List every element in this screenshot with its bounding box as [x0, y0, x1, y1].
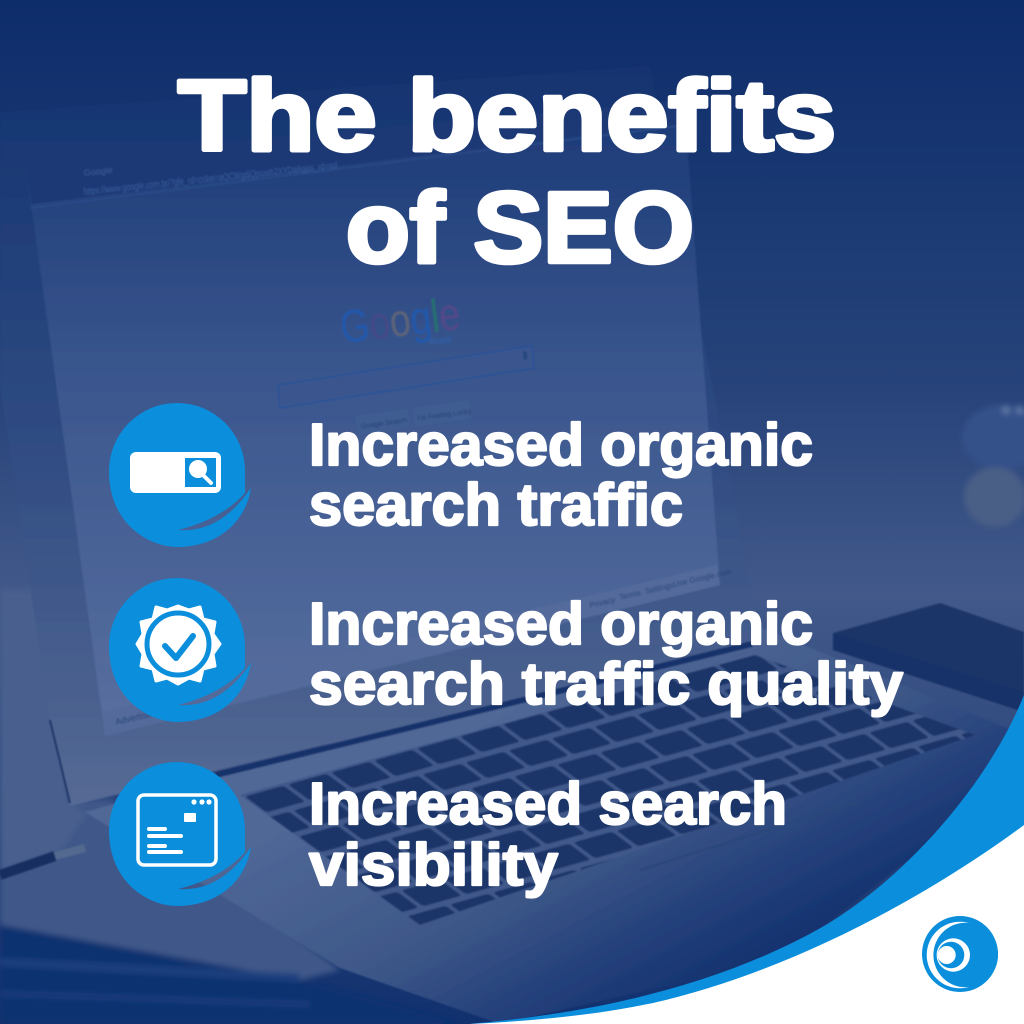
background photo: laptop on desk: Use Google.com	[672, 567, 733, 589]
benefit 2 icon: quality badge	[109, 578, 251, 722]
search buttons: I'm Feeling Lucky	[417, 408, 472, 423]
background photo: laptop on desk: Google	[83, 165, 113, 178]
background photo: laptop on desk: Privacy	[588, 595, 616, 610]
background photo: laptop on desk: Advertising	[114, 707, 160, 727]
bottom right white corner	[470, 825, 1024, 1024]
phone on desk	[833, 603, 1024, 712]
benefit 1 icon: search bar	[109, 403, 251, 547]
title: The benefits	[178, 60, 836, 172]
background photo: laptop on desk: Settings	[644, 581, 675, 596]
background photo: laptop on desk: https://www.google.com.br/?gfe_rd=cr&ei=aQCWgdjQjsuwh2XYDa8gjas_rd=ssl	[83, 160, 338, 198]
background photo: laptop on desk: Terms	[618, 588, 642, 602]
benefit 1 text	[309, 412, 813, 538]
benefit 3 text: visibility	[309, 832, 558, 898]
bottom right blue band	[470, 695, 1024, 1024]
benefit 1 text: search traffic	[309, 472, 683, 538]
benefit 3 icon: browser window	[109, 762, 251, 906]
trackpad edge	[640, 802, 857, 870]
Google logo: Google	[337, 287, 463, 353]
laptop lid	[0, 66, 758, 806]
search buttons	[356, 400, 473, 434]
title	[178, 60, 836, 284]
laptop deck	[85, 625, 1024, 1024]
title: of SEO	[346, 172, 694, 284]
benefit 1 text: Increased organic	[309, 412, 813, 478]
logo	[922, 916, 998, 992]
hinge	[216, 644, 752, 775]
footer strip	[102, 565, 720, 736]
Google logo: Brasil	[428, 334, 452, 347]
keyboard keys	[240, 655, 975, 925]
search box	[278, 346, 534, 408]
blurred desk objects	[0, 405, 1024, 1024]
benefit 2 text	[309, 591, 903, 717]
benefit 2 text: search traffic quality	[309, 651, 903, 717]
benefit 2 text: Increased organic	[309, 591, 813, 657]
browser bars	[25, 100, 686, 204]
cable and plug	[0, 856, 55, 875]
browser screen	[25, 100, 720, 736]
benefit 3 text	[309, 771, 787, 898]
search buttons: Google Search	[361, 417, 408, 431]
benefit 3 text: Increased search	[309, 771, 787, 837]
